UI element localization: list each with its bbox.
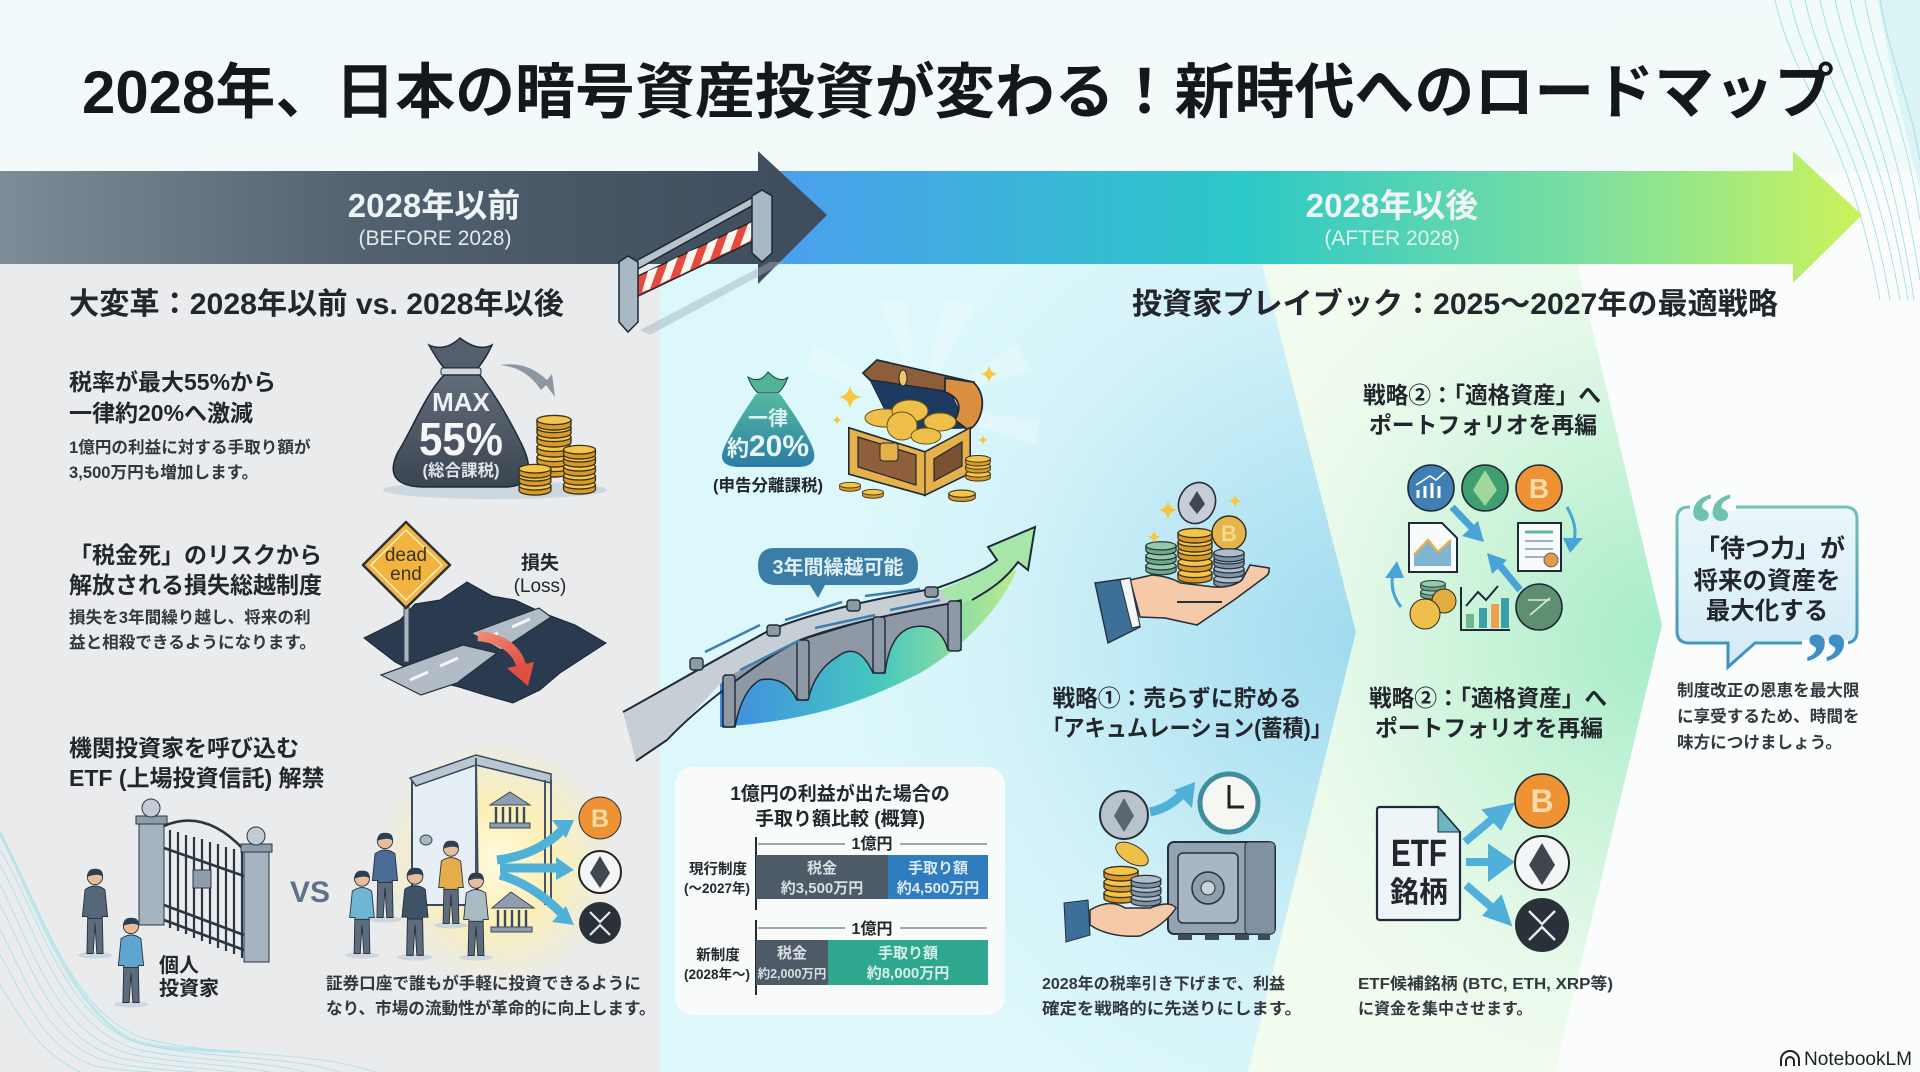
panel: ETF <box>69 735 656 1018</box>
icon: barrier gate <box>619 190 785 335</box>
text block: loss carry-forward <box>69 542 322 652</box>
text block: ETF description <box>326 973 656 1018</box>
text block: ETF description: なり、市場の流動性が革命的に向上します。 <box>326 998 656 1018</box>
callout: 3-year carry-forward <box>758 548 918 598</box>
chart: bridge with rising arrow <box>623 527 1035 761</box>
icon: dead end sign: end <box>390 564 422 585</box>
text block: strategy 1: 2028年の税率引き下げまで、利益 <box>1042 974 1285 993</box>
icon: ETF document: ETF <box>1391 833 1447 875</box>
text block: strategy 2: ETF候補銘柄 (BTC, ETH, XRP等) <box>1358 974 1613 993</box>
text block: tax rate <box>69 369 311 482</box>
text block: closing advice: 味方につけましょう。 <box>1677 732 1842 752</box>
icon: ETF document: 銘柄 <box>1390 876 1448 909</box>
icon: money bag 55% with coins <box>383 338 607 499</box>
heading: before vs after: 大変革：2028年以前 vs. 2028年以後 <box>69 288 564 321</box>
icon: money bag 55% with coins: MAX <box>432 387 491 417</box>
text block: ETF: ETF (上場投資信託) 解禁 <box>69 765 325 791</box>
callout: power of waiting: 最大化する <box>1706 597 1828 625</box>
text block: loss carry-forward: 解放される損失総越制度 <box>69 572 322 598</box>
icon: bitcoin coin: B <box>591 805 609 833</box>
text block: closing advice: に享受するため、時間を <box>1677 707 1860 726</box>
row: new system: 新制度 <box>696 946 740 964</box>
text block: ETF description: 証券口座で誰もが手軽に投資できるように <box>326 973 641 993</box>
text block: tax rate: 3,500万円も増加します。 <box>69 462 258 482</box>
icon: coin, clock and safe <box>1064 774 1275 942</box>
row: current system: 1億円 <box>852 835 892 853</box>
label: individual investor <box>159 954 219 1000</box>
row: current system: 約4,500万円 <box>897 880 979 897</box>
callout: power of waiting: 「待つ力」が <box>1695 534 1845 563</box>
heading: strategy 1: 戦略①：売らずに貯める <box>1052 685 1302 711</box>
icon: ethereum coin <box>579 851 621 893</box>
callout: 3-year carry-forward: 3年間繰越可能 <box>772 556 904 579</box>
heading: strategy 1: 「アキュムレーション(蓄積)」 <box>1042 715 1332 741</box>
chart title: 1億円の利益が出た場合の <box>730 782 950 805</box>
row: new system: (2028年〜) <box>684 966 750 982</box>
text block: loss carry-forward: 損失を3年間繰り越し、将来の利 <box>69 607 311 627</box>
icon: money bag 55% with coins: 55% <box>419 413 503 465</box>
label: individual investor: 投資家 <box>159 977 219 1000</box>
heading: strategy 2 lower: 戦略②：「適格資産」へ <box>1369 685 1607 711</box>
icon: bitcoin <box>1515 774 1569 828</box>
heading: strategy 2 lower: ポートフォリオを再編 <box>1375 715 1603 741</box>
label: individual investor: 個人 <box>159 954 199 977</box>
icon: xrp <box>1515 898 1569 952</box>
icon: hand holding coins <box>1095 476 1269 643</box>
quote mark: opening: “ <box>1689 476 1733 573</box>
row: new system: 手取り額 <box>878 944 938 962</box>
row: current system: (〜2027年) <box>684 880 750 896</box>
text block: strategy 2: に資金を集中させます。 <box>1358 999 1532 1018</box>
heading: strategy 2 upper: ポートフォリオを再編 <box>1369 412 1597 438</box>
row: new system <box>684 920 988 985</box>
heading: investor playbook: 投資家プレイブック：2025〜2027年の最適戦略 <box>1132 287 1778 321</box>
icon: broken road with hole <box>363 522 606 703</box>
text block: loss carry-forward: 「税金死」のリスクから <box>69 542 322 568</box>
heading: strategy 1 <box>1042 685 1332 741</box>
panel: loss carry-forward <box>69 522 606 703</box>
text block: closing advice <box>1677 680 1860 752</box>
row: new system: 約2,000万円 <box>758 966 826 981</box>
text block: strategy 1 <box>1042 974 1302 1018</box>
text block: strategy 2 <box>1358 974 1613 1018</box>
row: new system: 税金 <box>777 944 807 962</box>
text block: tax rate: 一律約20%へ激減 <box>69 400 253 426</box>
chart title <box>730 782 950 830</box>
icon: money bag 55% with coins: (総合課税) <box>422 461 500 480</box>
callout: power of waiting <box>1677 476 1857 713</box>
label: loss: 損失 <box>521 552 559 574</box>
icon: ethereum <box>1515 836 1569 890</box>
person: individual investor 2 <box>114 918 148 1007</box>
panel: strategy 2 lower <box>1358 685 1613 1018</box>
heading: strategy 2 upper <box>1363 382 1601 438</box>
icon: dead end sign: dead <box>385 545 427 566</box>
row: current system: 手取り額 <box>908 859 968 877</box>
icon: sun rays behind chest <box>805 300 1040 445</box>
arrow: before 2028: 2028年以前 <box>348 187 520 224</box>
chart title: 手取り額比較 (概算) <box>755 807 925 830</box>
person: individual investor <box>78 869 112 958</box>
text block: strategy 1: 確定を戦略的に先送りにします。 <box>1042 999 1302 1018</box>
icon: treasure chest <box>832 360 998 501</box>
icon: closed gate <box>136 799 272 962</box>
row: new system: 1億円 <box>852 920 892 938</box>
callout: power of waiting: 将来の資産を <box>1694 567 1840 595</box>
icon: bitcoin coin <box>579 797 621 839</box>
panel: strategy 2 upper <box>1363 382 1601 630</box>
text block: closing advice: 制度改正の恩恵を最大限 <box>1677 680 1860 700</box>
brand: NotebookLM: NotebookLM <box>1804 1049 1912 1070</box>
text block: ETF <box>69 735 325 791</box>
icon: money bag 20% <box>722 372 814 467</box>
heading: strategy 2 upper: 戦略②：「適格資産」へ <box>1363 382 1601 408</box>
row: new system: 約8,000万円 <box>867 965 949 982</box>
people group <box>345 833 493 960</box>
arrow: after 2028: (AFTER 2028) <box>1324 227 1460 250</box>
title: 2028年、日本の暗号資産投資が変わる！新時代へのロードマップ <box>82 59 1834 126</box>
arrow: after 2028: 2028年以後 <box>1306 187 1478 224</box>
row: current system: 約3,500万円 <box>781 880 863 897</box>
icon: portfolio rebalance: B <box>1529 473 1549 504</box>
icon: money bag 20%: 一律 <box>748 407 788 430</box>
icon: money bag 20%: 約20% <box>727 430 809 463</box>
arrow: before 2028: (BEFORE 2028) <box>359 227 511 250</box>
icon: open door with crypto <box>372 738 622 988</box>
row: current system: 現行制度 <box>689 860 747 878</box>
icon: bitcoin: B <box>1530 783 1554 819</box>
quote mark: closing: ” <box>1804 616 1848 713</box>
icon: dead end sign <box>363 522 450 662</box>
arrow: before 2028 <box>0 151 827 284</box>
text block: tax rate: 1億円の利益に対する手取り額が <box>69 437 311 457</box>
text block: ETF: 機関投資家を呼び込む <box>69 735 299 761</box>
arrow: after 2028 <box>740 151 1862 283</box>
panel: strategy 1 <box>1042 476 1332 1018</box>
label: VS: VS <box>290 876 330 909</box>
icon: hand holding coins: B <box>1221 521 1237 546</box>
label: separate taxation: (申告分離課税) <box>713 475 823 495</box>
label: loss: (Loss) <box>514 576 566 597</box>
row: current system: 税金 <box>807 859 837 877</box>
icon: portfolio rebalance <box>1385 465 1583 630</box>
label: loss <box>514 552 566 597</box>
icon: xrp coin <box>579 902 621 944</box>
row: current system <box>684 835 988 899</box>
text block: tax rate: 税率が最大55%から <box>69 369 276 395</box>
panel: tax rate <box>69 338 607 499</box>
text block: loss carry-forward: 益と相殺できるようになります。 <box>69 633 316 652</box>
panel: net proceeds comparison <box>675 767 1005 1015</box>
heading: strategy 2 lower <box>1369 685 1607 741</box>
arrows: ETF to coins <box>1465 808 1508 920</box>
icon: ETF document <box>1377 807 1460 920</box>
